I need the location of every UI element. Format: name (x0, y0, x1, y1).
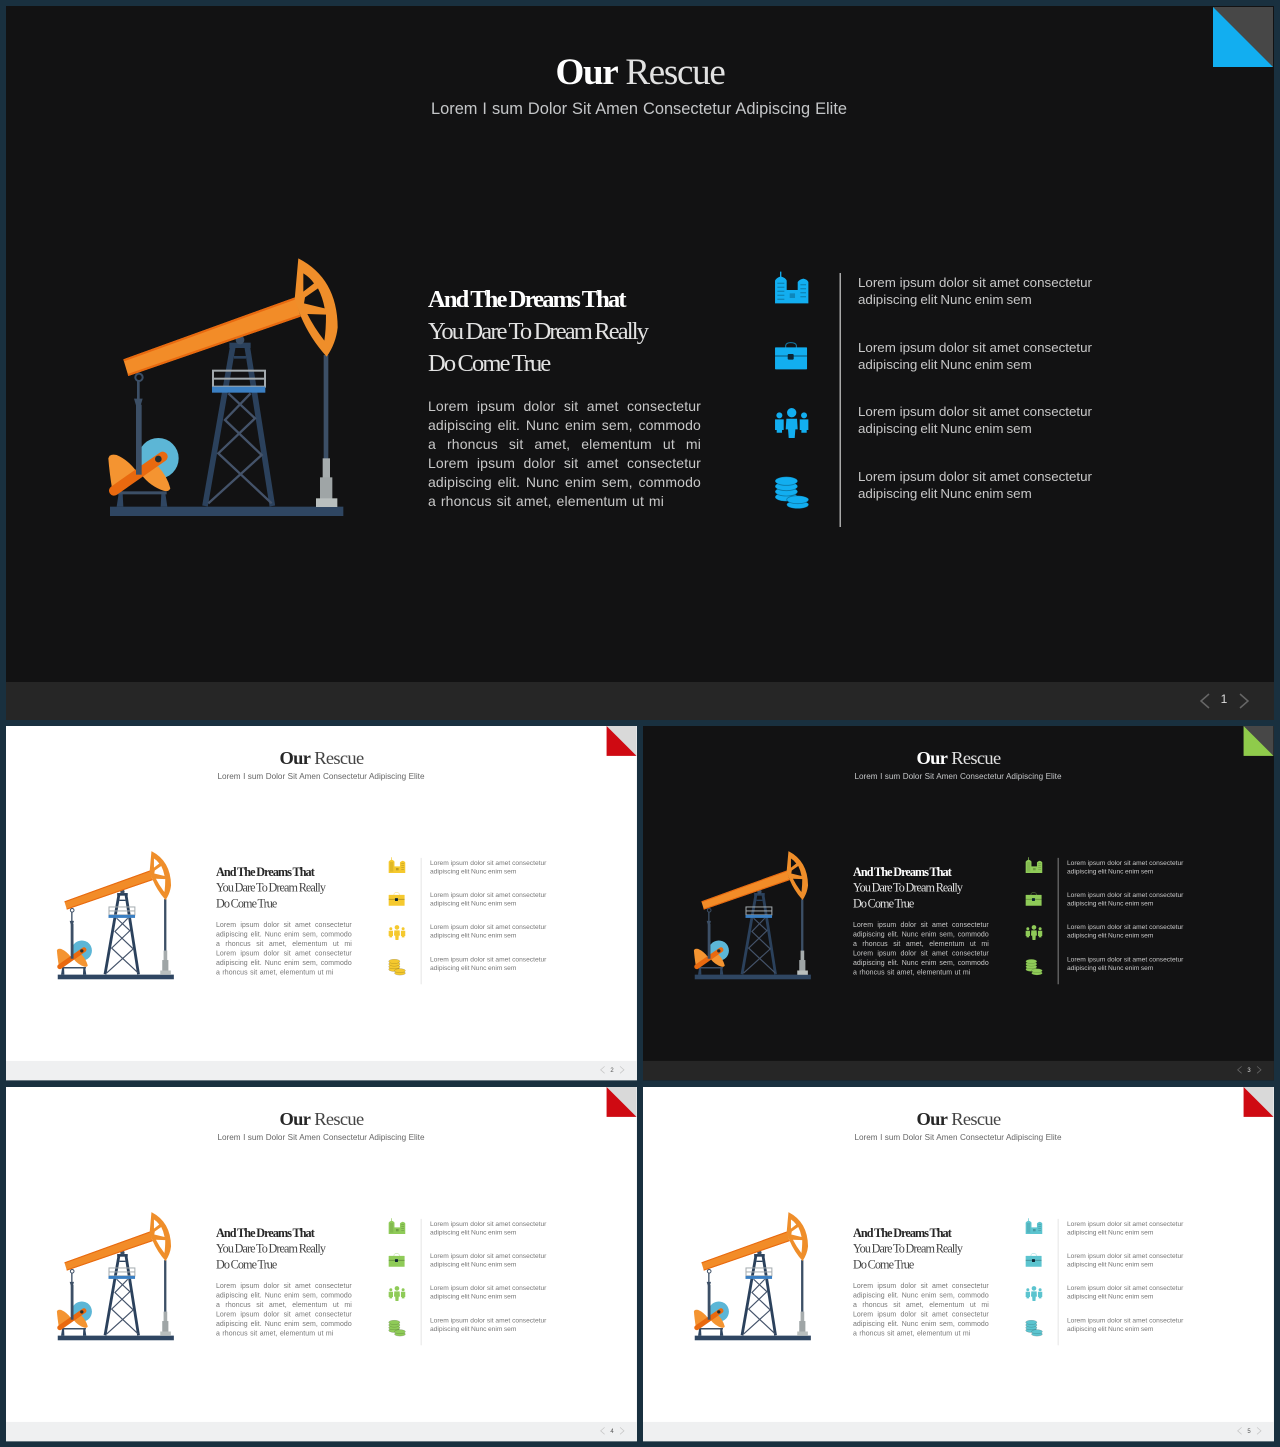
text block: paragraph: a rhoncus sit amet, elementum ut mi (216, 968, 333, 976)
heading: And The Dreams That (428, 286, 625, 312)
text block: item 1 (1067, 1220, 1184, 1236)
text block: paragraph: a rhoncus sit amet, elementum ut mi (428, 436, 701, 452)
text block: item 1: Lorem ipsum dolor sit amet consectetur (430, 1220, 546, 1227)
text block: item 3 (858, 404, 1092, 436)
text block: paragraph: Lorem ipsum dolor sit amet consectetur (216, 1282, 352, 1290)
panel: main dark slide (6, 6, 1274, 720)
text block: item 2: adipiscing elit Nunc enim sem (1067, 900, 1153, 907)
pagination (601, 1427, 624, 1435)
text block: item 3: adipiscing elit Nunc enim sem (858, 421, 1032, 436)
text block: item 4: Lorem ipsum dolor sit amet consectetur (430, 955, 546, 963)
text block: paragraph: Lorem ipsum dolor sit amet consectetur (428, 455, 701, 471)
text block: item 1 (430, 1220, 546, 1236)
icon: briefcase (389, 1254, 405, 1267)
icon: buildings (1026, 1218, 1042, 1234)
text block: paragraph: adipiscing elit. Nunc enim sem, commodo (853, 958, 989, 966)
text block: item 4: Lorem ipsum dolor sit amet consectetur (430, 1316, 546, 1324)
text block: paragraph (216, 1282, 352, 1337)
text block: item 2: Lorem ipsum dolor sit amet consectetur (858, 340, 1092, 355)
text block: paragraph (853, 921, 989, 976)
text block: item 2 (1067, 1252, 1184, 1268)
heading: You Dare To Dream Really (853, 1242, 962, 1255)
text block: item 2: adipiscing elit Nunc enim sem (858, 357, 1032, 372)
text block: paragraph: Lorem ipsum dolor sit amet consectetur (853, 1310, 989, 1318)
icon: coins (1026, 1320, 1042, 1336)
icon: briefcase (775, 343, 807, 369)
pagination: 2 (610, 1068, 614, 1074)
text block: paragraph: adipiscing elit. Nunc enim sem, commodo (853, 1319, 989, 1327)
illustration: oil pump jack (108, 258, 343, 516)
heading (853, 865, 963, 910)
text block: item 3: adipiscing elit Nunc enim sem (430, 1293, 516, 1300)
icon: buildings (1026, 857, 1042, 873)
text block: item 4 (858, 469, 1092, 501)
text block: paragraph: a rhoncus sit amet, elementum ut mi (853, 939, 989, 947)
text block: paragraph: a rhoncus sit amet, elementum ut mi (853, 968, 970, 976)
panel: light slide teal (643, 1087, 1274, 1441)
text block: paragraph: a rhoncus sit amet, elementum ut mi (216, 1300, 352, 1308)
text block: paragraph: adipiscing elit. Nunc enim sem, commodo (428, 417, 701, 433)
illustration: oil pump jack (57, 1212, 174, 1340)
text block: item 1: adipiscing elit Nunc enim sem (858, 292, 1032, 307)
footer bar (643, 1061, 1274, 1080)
text block: item 4: adipiscing elit Nunc enim sem (858, 486, 1032, 501)
panel: light slide green (6, 1087, 637, 1441)
text block: paragraph: a rhoncus sit amet, elementum ut mi (853, 1300, 989, 1308)
illustration: oil pump jack (694, 1212, 811, 1340)
text block: paragraph: a rhoncus sit amet, elementum ut mi (428, 493, 664, 509)
text block: item 1: adipiscing elit Nunc enim sem (430, 867, 516, 875)
footer bar (6, 1422, 637, 1441)
icon: briefcase (1026, 893, 1042, 906)
text block: item 2: Lorem ipsum dolor sit amet consectetur (1067, 1252, 1183, 1260)
text block: item 3: Lorem ipsum dolor sit amet consectetur (430, 1284, 546, 1292)
text block: paragraph: Lorem ipsum dolor sit amet consectetur (216, 921, 352, 929)
text block: item 2: Lorem ipsum dolor sit amet consectetur (430, 1252, 546, 1260)
text block: paragraph: a rhoncus sit amet, elementum ut mi (216, 939, 352, 947)
pagination: 5 (1247, 1429, 1251, 1435)
text block: paragraph: adipiscing elit. Nunc enim sem, commodo (853, 1291, 989, 1299)
text block: item 2 (1067, 891, 1184, 907)
text block: item 3: adipiscing elit Nunc enim sem (1067, 932, 1153, 939)
icon: briefcase (1026, 1254, 1042, 1267)
title: Our Rescue (916, 1109, 1000, 1129)
text block: item 3: Lorem ipsum dolor sit amet consectetur (1067, 923, 1183, 931)
text block: item 3 (1067, 1284, 1184, 1300)
icon: coins (389, 959, 405, 975)
text block: item 4: Lorem ipsum dolor sit amet consectetur (1067, 955, 1183, 963)
panel: dark slide green (643, 726, 1274, 1080)
text block: item 1: adipiscing elit Nunc enim sem (430, 1228, 516, 1236)
text block: item 4: adipiscing elit Nunc enim sem (430, 1325, 516, 1332)
text block: item 3 (1067, 923, 1184, 939)
heading: Do Come True (216, 897, 276, 910)
text block: paragraph: Lorem ipsum dolor sit amet consectetur (428, 398, 701, 414)
subtitle: Lorem I sum Dolor Sit Amen Consectetur Adipiscing Elite (217, 1133, 424, 1142)
text block: item 1: adipiscing elit Nunc enim sem (1067, 867, 1153, 875)
icon: people (389, 925, 405, 940)
illustration: oil pump jack (694, 851, 811, 979)
text block: item 3: Lorem ipsum dolor sit amet consectetur (430, 923, 546, 931)
heading (216, 865, 326, 910)
text block: item 4: adipiscing elit Nunc enim sem (1067, 964, 1153, 971)
text block: paragraph: Lorem ipsum dolor sit amet consectetur (853, 921, 989, 929)
text block: item 2 (430, 891, 546, 907)
icon: buildings (389, 1218, 405, 1234)
heading: Do Come True (853, 1258, 913, 1271)
icon: buildings (775, 272, 808, 303)
text block: paragraph: adipiscing elit. Nunc enim sem, commodo (853, 930, 989, 938)
text block: paragraph: Lorem ipsum dolor sit amet consectetur (853, 949, 989, 957)
title: Our Rescue (556, 52, 724, 93)
text block: item 2: adipiscing elit Nunc enim sem (430, 1261, 516, 1268)
text block: paragraph: Lorem ipsum dolor sit amet consectetur (216, 949, 352, 957)
subtitle: Lorem I sum Dolor Sit Amen Consectetur Adipiscing Elite (854, 772, 1061, 781)
text block: item 3 (430, 923, 546, 939)
heading: You Dare To Dream Really (216, 881, 325, 894)
footer bar (6, 682, 1274, 720)
text block: paragraph: Lorem ipsum dolor sit amet consectetur (216, 1310, 352, 1318)
heading: Do Come True (428, 350, 549, 376)
text block: item 1: Lorem ipsum dolor sit amet consectetur (858, 275, 1092, 290)
text block: item 4 (430, 1316, 546, 1332)
subtitle: Lorem I sum Dolor Sit Amen Consectetur Adipiscing Elite (217, 772, 424, 781)
text block: item 3: adipiscing elit Nunc enim sem (1067, 1293, 1153, 1300)
subtitle: Lorem I sum Dolor Sit Amen Consectetur Adipiscing Elite (431, 100, 847, 118)
title: Our Rescue (279, 748, 363, 768)
pagination (1238, 1066, 1261, 1074)
text block: item 4: Lorem ipsum dolor sit amet consectetur (1067, 1316, 1183, 1324)
heading (853, 1226, 963, 1271)
text block: item 2 (430, 1252, 546, 1268)
text block: item 2: adipiscing elit Nunc enim sem (430, 900, 516, 907)
text block: item 2: adipiscing elit Nunc enim sem (1067, 1261, 1153, 1268)
corner fold (1244, 1087, 1273, 1117)
illustration: oil pump jack (57, 851, 174, 979)
pagination (1201, 692, 1248, 708)
heading: Do Come True (216, 1258, 276, 1271)
text block: item 2 (858, 340, 1092, 372)
text block: paragraph (853, 1282, 989, 1337)
text block: paragraph: a rhoncus sit amet, elementum ut mi (853, 1329, 970, 1337)
text block: paragraph: adipiscing elit. Nunc enim sem, commodo (216, 1291, 352, 1299)
text block: item 3: Lorem ipsum dolor sit amet consectetur (858, 404, 1092, 419)
heading: And The Dreams That (853, 1226, 951, 1240)
icon: coins (389, 1320, 405, 1336)
text block: item 1 (858, 275, 1092, 307)
pagination: 3 (1247, 1068, 1251, 1074)
text block: item 4: adipiscing elit Nunc enim sem (430, 964, 516, 971)
text block: item 4 (430, 955, 546, 972)
icon: people (775, 408, 808, 438)
text block: paragraph: a rhoncus sit amet, elementum ut mi (216, 1329, 333, 1337)
icon: people (1026, 925, 1042, 940)
text block: paragraph: Lorem ipsum dolor sit amet consectetur (853, 1282, 989, 1290)
icon: coins (775, 477, 809, 509)
corner fold (607, 726, 636, 756)
text block: paragraph: adipiscing elit. Nunc enim sem, commodo (428, 474, 701, 490)
corner fold (1213, 7, 1273, 67)
icon: briefcase (389, 893, 405, 906)
icon: buildings (389, 857, 405, 873)
text block: item 1 (1067, 859, 1184, 875)
text block: item 2: Lorem ipsum dolor sit amet consectetur (430, 891, 546, 899)
text block: paragraph (216, 921, 352, 976)
pagination: 4 (610, 1429, 614, 1435)
text block: paragraph: adipiscing elit. Nunc enim sem, commodo (216, 958, 352, 966)
pagination (601, 1066, 624, 1074)
heading: You Dare To Dream Really (428, 318, 647, 344)
heading: And The Dreams That (216, 865, 314, 879)
title: Our Rescue (279, 1109, 363, 1129)
title: Our Rescue (916, 748, 1000, 768)
corner fold (1244, 726, 1273, 756)
text block: item 1 (430, 859, 546, 875)
text block: item 1: Lorem ipsum dolor sit amet consectetur (1067, 859, 1183, 866)
icon: people (1026, 1286, 1042, 1301)
heading: And The Dreams That (216, 1226, 314, 1240)
text block: item 3: adipiscing elit Nunc enim sem (430, 932, 516, 939)
text block: item 3 (430, 1284, 546, 1300)
text block: paragraph: adipiscing elit. Nunc enim sem, commodo (216, 1319, 352, 1327)
text block: item 2: Lorem ipsum dolor sit amet consectetur (1067, 891, 1183, 899)
heading: And The Dreams That (853, 865, 951, 879)
heading: You Dare To Dream Really (853, 881, 962, 894)
text block: item 3: Lorem ipsum dolor sit amet consectetur (1067, 1284, 1183, 1292)
text block: paragraph (428, 398, 701, 509)
icon: coins (1026, 959, 1042, 975)
text block: item 1: Lorem ipsum dolor sit amet consectetur (430, 859, 546, 866)
text block: item 4: adipiscing elit Nunc enim sem (1067, 1325, 1153, 1332)
heading (216, 1226, 326, 1271)
subtitle: Lorem I sum Dolor Sit Amen Consectetur Adipiscing Elite (854, 1133, 1061, 1142)
text block: item 1: Lorem ipsum dolor sit amet consectetur (1067, 1220, 1183, 1227)
text block: item 4 (1067, 955, 1184, 972)
footer bar (6, 1061, 637, 1080)
heading (428, 286, 649, 376)
footer bar (643, 1422, 1274, 1441)
corner fold (607, 1087, 636, 1117)
panel: light slide yellow (6, 726, 637, 1080)
pagination (1238, 1427, 1261, 1435)
text block: paragraph: adipiscing elit. Nunc enim sem, commodo (216, 930, 352, 938)
pagination: 1 (1221, 692, 1228, 706)
text block: item 4 (1067, 1316, 1184, 1332)
heading: You Dare To Dream Really (216, 1242, 325, 1255)
heading: Do Come True (853, 897, 913, 910)
text block: item 4: Lorem ipsum dolor sit amet consectetur (858, 469, 1092, 484)
text block: item 1: adipiscing elit Nunc enim sem (1067, 1228, 1153, 1236)
icon: people (389, 1286, 405, 1301)
